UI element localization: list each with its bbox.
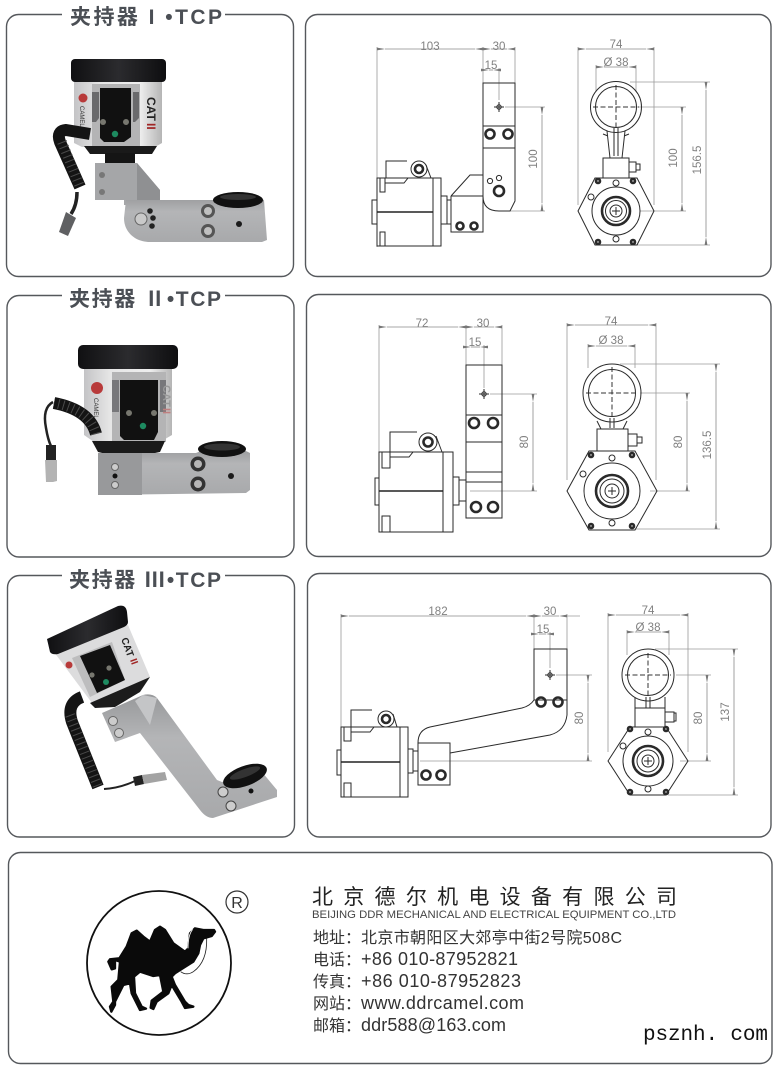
drawing: gripper II front view bbox=[567, 316, 720, 530]
drawing: gripper III front view: Ø 38 bbox=[636, 622, 660, 634]
drawing: gripper I side view bbox=[372, 41, 545, 247]
drawing: gripper II front view: 74 bbox=[605, 316, 618, 328]
photo: gripper II with straight arm bbox=[45, 345, 250, 495]
photo: gripper I with arm bbox=[59, 59, 267, 242]
drawing: gripper III side view: 182 bbox=[428, 606, 448, 618]
text: company name: 北京德尔机电设备有限公司 bbox=[312, 886, 677, 909]
panel: gripper I dimension drawings bbox=[306, 14, 771, 276]
drawing: gripper II side view: 80 bbox=[519, 436, 531, 448]
text: contact details: ddr588@163.com bbox=[361, 1015, 506, 1035]
text: contact details bbox=[313, 929, 622, 1035]
drawing: gripper I front view: 156.5 bbox=[692, 146, 704, 174]
icon: registered mark bbox=[226, 891, 248, 913]
drawing: gripper II side view: 72 bbox=[416, 318, 428, 330]
drawing: gripper II front view: 80 bbox=[673, 436, 685, 448]
photo: gripper III with offset arm: II bbox=[127, 657, 139, 666]
icon: camel silhouette bbox=[108, 927, 215, 1012]
cable: gripper I coil bbox=[59, 130, 90, 236]
panel: gripper II dimension drawings bbox=[306, 294, 771, 556]
photo: gripper II with straight arm: CAMEL bbox=[92, 398, 98, 419]
logo: camel in circle bbox=[87, 891, 248, 1035]
heading: gripper II: 夹持器 Ⅱ•TCP bbox=[69, 288, 221, 311]
text: contact details: 电话： bbox=[313, 951, 361, 969]
panel: gripper III photo bbox=[8, 568, 294, 837]
photo: gripper III with offset arm: CAT bbox=[118, 636, 135, 659]
text: contact details: +86 010-87952821 bbox=[361, 949, 518, 969]
drawing: gripper III side view: 15 bbox=[537, 624, 549, 636]
cable: gripper III coil bbox=[70, 697, 167, 789]
drawing: gripper I side view: 30 bbox=[493, 41, 505, 53]
text: watermark: psznh. com bbox=[643, 1024, 768, 1047]
text: contact details: 北京市朝阳区大郊亭中街2号院508C bbox=[361, 929, 622, 947]
drawing: gripper I side view: 103 bbox=[420, 41, 440, 53]
photo: gripper III with offset arm bbox=[47, 606, 277, 818]
drawing: gripper III front view: 137 bbox=[720, 702, 732, 722]
text: contact details: 地址： bbox=[313, 929, 361, 947]
text: company name: BEIJING DDR MECHANICAL AND ELECTRICAL EQUIPMENT CO.,LTD bbox=[312, 909, 676, 921]
drawing: gripper I front view bbox=[578, 39, 710, 245]
drawing: gripper II side view: 15 bbox=[469, 337, 481, 349]
heading: gripper I: 夹持器 I •TCP bbox=[70, 6, 222, 29]
drawing: gripper II front view: 136.5 bbox=[702, 431, 714, 459]
text: company name bbox=[312, 886, 677, 921]
drawing: gripper III front view bbox=[608, 605, 738, 795]
drawing: gripper III front view: 74 bbox=[642, 605, 655, 617]
icon: registered mark: R bbox=[231, 895, 243, 912]
drawing: gripper I front view: 100 bbox=[668, 148, 680, 168]
panel: gripper III dimension drawings bbox=[308, 574, 771, 837]
heading: gripper III: 夹持器 Ⅲ•TCP bbox=[69, 569, 221, 592]
drawing: gripper I front view: Ø 38 bbox=[604, 57, 628, 69]
drawing: gripper III side view bbox=[337, 606, 592, 797]
photo: gripper II with straight arm: II bbox=[160, 408, 172, 414]
drawing: gripper II front view: Ø 38 bbox=[599, 335, 623, 347]
drawing: gripper I side view: 15 bbox=[485, 60, 497, 72]
drawing: gripper II side view bbox=[375, 318, 537, 532]
text: contact details: www.ddrcamel.com bbox=[360, 993, 524, 1013]
cable: gripper II coil bbox=[45, 402, 96, 482]
text: contact details: 传真： bbox=[313, 973, 361, 991]
text: contact details: 网站： bbox=[313, 995, 361, 1013]
panel: gripper I photo bbox=[6, 6, 294, 276]
panel: company information bbox=[8, 852, 772, 1064]
drawing: gripper III side view: 80 bbox=[574, 712, 586, 724]
photo: gripper II with straight arm: CAT bbox=[160, 385, 172, 407]
text: contact details: 邮箱： bbox=[313, 1017, 361, 1035]
photo: gripper I with arm: CAT bbox=[144, 97, 158, 121]
photo: gripper I with arm: CAMEL bbox=[78, 106, 84, 127]
drawing: gripper II side view: 30 bbox=[477, 318, 489, 330]
drawing: gripper I front view: 74 bbox=[610, 39, 623, 51]
text: contact details: +86 010-87952823 bbox=[361, 971, 521, 991]
drawing: gripper I side view: 100 bbox=[528, 149, 540, 169]
photo: gripper I with arm: II bbox=[144, 123, 158, 130]
drawing: gripper III front view: 80 bbox=[693, 712, 705, 724]
panel: gripper II photo bbox=[7, 288, 294, 557]
drawing: gripper III side view: 30 bbox=[544, 606, 556, 618]
